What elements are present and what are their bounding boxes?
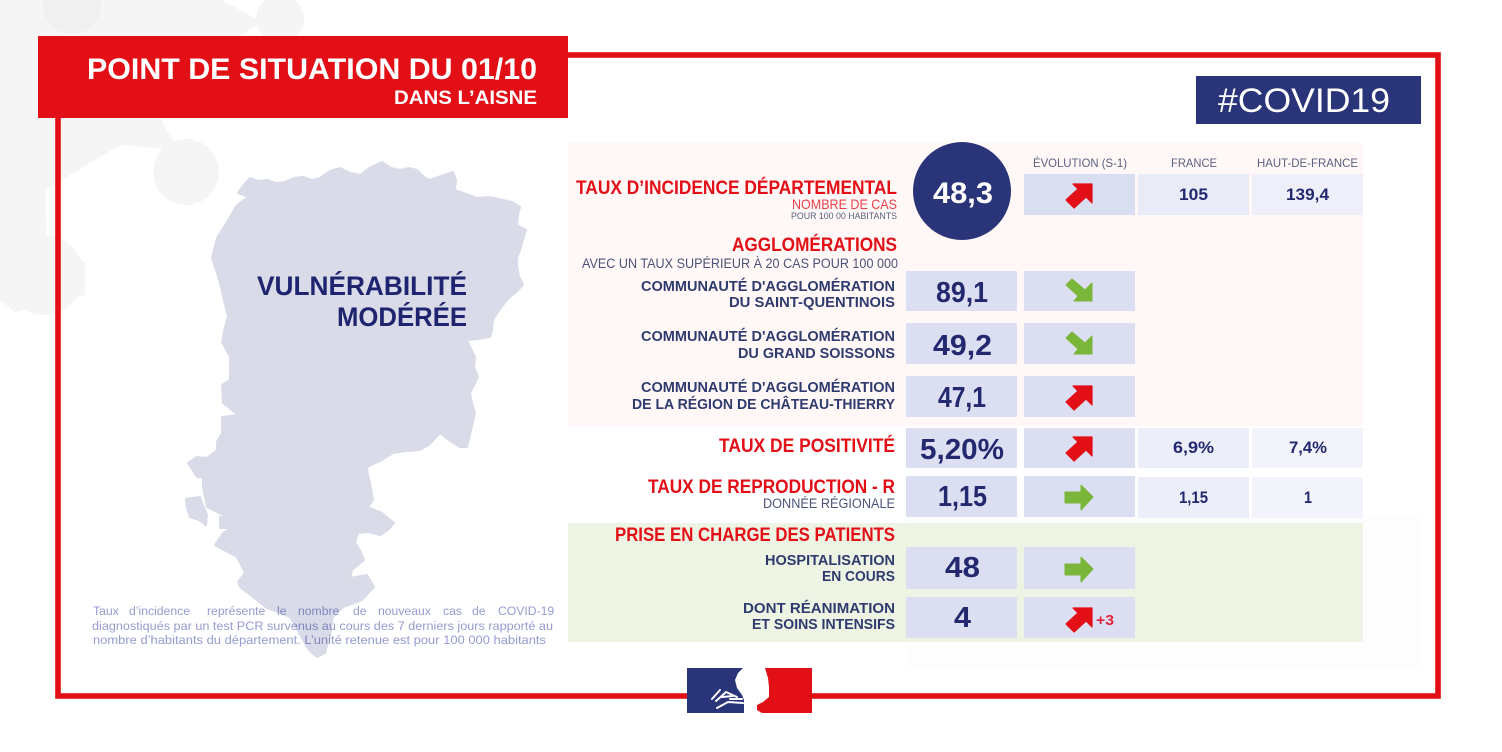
definition note: nombre d’habitants du département. L’unité retenue est pour 100 000 habitants xyxy=(93,633,546,647)
row: departmental incidence xyxy=(576,142,1363,240)
title banner xyxy=(38,36,568,118)
map of Aisne department xyxy=(186,162,526,657)
definition note: diagnostiqués par un test PCR survenus au cours des 7 derniers jours rapporté au xyxy=(92,619,553,633)
agglomerations heading: AGGLOMÉRATIONS xyxy=(732,234,897,256)
row: departmental incidence: 105 xyxy=(1179,186,1208,204)
background virus motif xyxy=(0,0,304,315)
row: positivity rate: TAUX DE POSITIVITÉ xyxy=(719,435,895,457)
row: reproduction rate: 1,15 xyxy=(1179,489,1208,507)
definition note: COVID-19 xyxy=(498,604,554,618)
definition note: d’incidence xyxy=(129,604,190,618)
row: positivity rate xyxy=(719,428,1363,468)
definition note: nouveaux xyxy=(378,604,431,618)
row: Saint-Quentinois xyxy=(641,271,1135,311)
panel: patient care xyxy=(568,523,1363,642)
column headers xyxy=(1033,155,1358,170)
row: Château-Thierry xyxy=(632,376,1135,417)
row: hospitalisation: 48 xyxy=(945,552,980,584)
faint backing panel xyxy=(906,515,1420,668)
definition note: de xyxy=(472,604,486,618)
panel: incidence and agglomerations xyxy=(568,142,1363,426)
vulnerability label: MODÉRÉE xyxy=(337,301,467,332)
row: reproduction rate: TAUX DE REPRODUCTION - R xyxy=(648,477,895,498)
definition note xyxy=(92,604,554,647)
row: Saint-Quentinois: COMMUNAUTÉ D'AGGLOMÉRATION xyxy=(641,278,895,295)
row: Château-Thierry: 47,1 xyxy=(938,382,986,414)
row: positivity rate: 6,9% xyxy=(1173,439,1214,457)
definition note: cas xyxy=(443,604,462,618)
definition note: de xyxy=(353,604,367,618)
row: departmental incidence: NOMBRE DE CAS xyxy=(792,196,897,212)
definition note: Taux xyxy=(93,604,119,618)
row: intensive care: DONT RÉANIMATION xyxy=(743,600,895,617)
row: Grand Soissons xyxy=(641,323,1135,364)
definition note: le xyxy=(277,604,287,618)
row: departmental incidence: TAUX D’INCIDENCE DÉPARTEMENTAL xyxy=(576,177,897,199)
vulnerability label xyxy=(257,270,467,332)
hashtag badge: #COVID19 xyxy=(1218,82,1390,120)
row: departmental incidence: POUR 100 00 HABITANTS xyxy=(791,211,897,222)
row: intensive care: +3 xyxy=(1096,612,1114,629)
row: Grand Soissons: DU GRAND SOISSONS xyxy=(738,346,895,362)
row: Grand Soissons: COMMUNAUTÉ D'AGGLOMÉRATION xyxy=(641,328,895,345)
row: reproduction rate: DONNÉE RÉGIONALE xyxy=(763,496,895,511)
vulnerability label: VULNÉRABILITÉ xyxy=(257,270,467,301)
row: positivity rate: 5,20% xyxy=(920,434,1004,466)
row: intensive care xyxy=(743,597,1135,638)
row: intensive care: 4 xyxy=(954,602,971,634)
row: reproduction rate xyxy=(648,476,1363,518)
agglomerations heading xyxy=(582,234,898,271)
row: intensive care: ET SOINS INTENSIFS xyxy=(752,617,895,633)
row: hospitalisation: HOSPITALISATION xyxy=(765,553,895,569)
row: Grand Soissons: 49,2 xyxy=(933,330,992,362)
row: departmental incidence: 48,3 xyxy=(933,177,993,210)
agglomerations heading: AVEC UN TAUX SUPÉRIEUR À 20 CAS POUR 100 000 xyxy=(582,256,898,271)
row: Saint-Quentinois: DU SAINT-QUENTINOIS xyxy=(729,295,895,311)
row: reproduction rate: 1,15 xyxy=(938,481,987,513)
definition note: représente xyxy=(207,604,265,618)
column headers: ÉVOLUTION (S-1) xyxy=(1033,155,1127,170)
title banner: POINT DE SITUATION DU 01/10 xyxy=(87,53,537,86)
row: reproduction rate: 1 xyxy=(1304,489,1312,507)
column headers: HAUT-DE-FRANCE xyxy=(1257,156,1358,170)
title banner: DANS L’AISNE xyxy=(394,87,537,109)
patient care heading: PRISE EN CHARGE DES PATIENTS xyxy=(615,525,895,546)
row: hospitalisation: EN COURS xyxy=(822,569,895,585)
definition note: nombre xyxy=(298,604,340,618)
red page frame xyxy=(58,55,1438,696)
row: positivity rate: 7,4% xyxy=(1289,439,1327,457)
row: Saint-Quentinois: 89,1 xyxy=(936,277,988,309)
column headers: FRANCE xyxy=(1171,156,1217,170)
hashtag badge xyxy=(1196,76,1421,124)
row: Château-Thierry: DE LA RÉGION DE CHÂTEAU-THIERRY xyxy=(632,395,895,413)
row: hospitalisation xyxy=(765,547,1135,589)
row: departmental incidence: 139,4 xyxy=(1286,186,1330,204)
row: Château-Thierry: COMMUNAUTÉ D'AGGLOMÉRATION xyxy=(641,379,895,396)
logo: Marianne xyxy=(687,660,812,720)
